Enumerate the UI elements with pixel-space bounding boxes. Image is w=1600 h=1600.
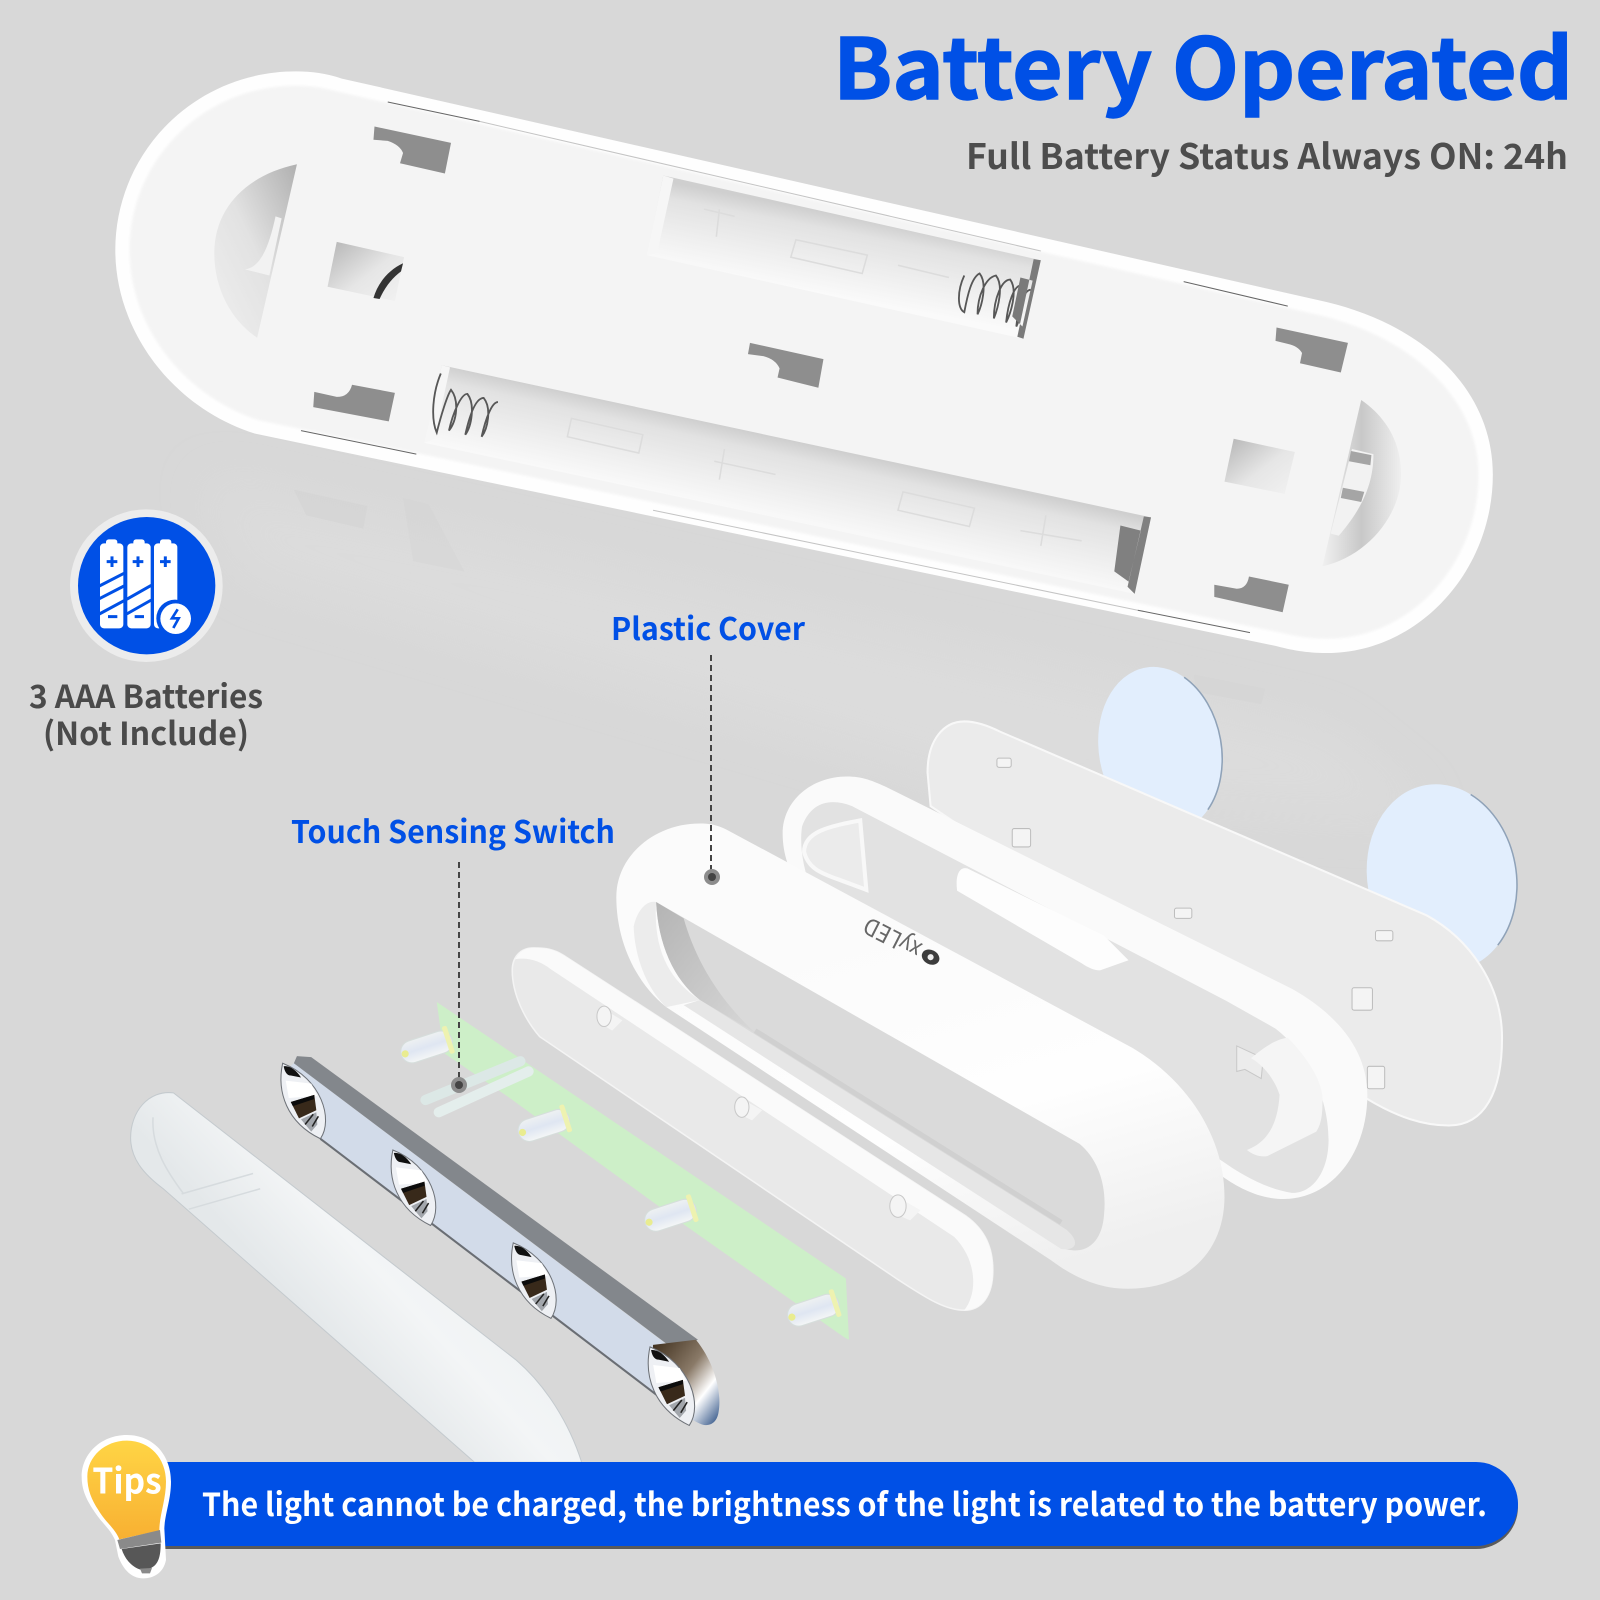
bulb tip — [140, 1568, 152, 1573]
caption line 2: (Not Include) — [43, 709, 249, 755]
bulb outline — [82, 1435, 171, 1578]
artwork: exploded product view — [115, 71, 1531, 1462]
cradle — [804, 820, 866, 890]
right square opening — [1224, 439, 1295, 494]
battery markings — [99, 556, 171, 617]
reflector top band — [294, 1056, 698, 1349]
inner tube — [957, 868, 1129, 970]
opening left wall lit — [634, 902, 700, 1007]
adhesive sticker disc lower — [1352, 772, 1531, 983]
chrome reflector bar — [281, 1056, 719, 1425]
plate upper rim — [515, 948, 993, 1310]
label: Touch Sensing Switch: Touch Sensing Switch — [291, 807, 615, 852]
cup 3 — [512, 1243, 556, 1318]
back case frame — [783, 777, 1367, 1199]
opening band shade — [755, 1031, 1061, 1222]
LED 2 — [514, 1104, 574, 1147]
left half-moon opening — [214, 164, 297, 338]
front diffuser plate — [512, 948, 993, 1310]
tips label: Tips — [92, 1453, 162, 1504]
LED 1 — [397, 1025, 456, 1069]
tab slot — [1237, 1046, 1263, 1079]
spring — [959, 273, 1031, 327]
mounting post 2 — [735, 1097, 762, 1120]
opening left wall shaded — [656, 902, 755, 1033]
tips banner — [160, 1462, 1518, 1549]
case cavity — [801, 802, 1329, 1193]
bulb base — [122, 1543, 161, 1570]
badge disc — [78, 517, 215, 654]
mounting post 3 — [890, 1195, 920, 1220]
end crescent — [1247, 1038, 1323, 1156]
bulb collar — [117, 1530, 161, 1549]
LED 3 — [641, 1194, 700, 1237]
callout line: Plastic Cover — [704, 655, 720, 885]
clip slot top left — [373, 127, 451, 173]
outer shell — [115, 71, 1493, 653]
opening lower band — [684, 1000, 1075, 1249]
subtitle: Full Battery Status Always ON: 24h — [966, 129, 1568, 180]
contact plate — [1114, 516, 1151, 594]
cup 4 — [648, 1347, 695, 1425]
front plastic cover frame — [616, 823, 1224, 1289]
back plate — [928, 721, 1502, 1126]
icon: three AAA batteries — [70, 509, 223, 662]
end rim — [653, 1340, 719, 1425]
cup 1 — [281, 1063, 326, 1139]
charge badge — [156, 600, 194, 637]
bulb glass — [87, 1441, 166, 1539]
callout line: Touch Sensing Switch — [451, 862, 467, 1093]
battery caption — [29, 672, 263, 755]
seam lines — [301, 102, 1288, 633]
clip slot middle — [748, 343, 823, 388]
clip slot bottom right — [1214, 577, 1289, 612]
icon: tips light bulb — [82, 1435, 171, 1578]
upper battery compartment — [647, 176, 1041, 339]
right half-moon opening — [1322, 400, 1401, 566]
cover opening — [656, 902, 1105, 1250]
reflector lower edge — [320, 1139, 663, 1400]
contact strip — [1012, 259, 1041, 339]
banner body — [160, 1462, 1518, 1546]
brand mark — [857, 910, 946, 978]
inner face — [130, 86, 1479, 639]
reflector face — [282, 1063, 671, 1400]
clips on back plate — [997, 758, 1393, 1089]
label: Plastic Cover: Plastic Cover — [611, 604, 805, 649]
title: Battery Operated — [833, 3, 1573, 124]
cup 2 — [391, 1150, 436, 1226]
banner text: The light cannot be charged, the brightness of the light is related to the battery power. — [202, 1480, 1487, 1526]
banner shadow — [160, 1465, 1518, 1549]
top device: open battery case — [115, 71, 1493, 653]
brand mark: xyLED — [857, 910, 927, 968]
device reflection — [204, 480, 1429, 816]
green circuit board with LEDs — [397, 1002, 849, 1340]
adhesive sticker disc upper — [1085, 657, 1235, 843]
left square opening — [328, 242, 404, 301]
clear lens cover — [131, 1093, 582, 1462]
mounting post 1 — [597, 1006, 622, 1031]
lower battery compartment — [424, 365, 1151, 594]
spring — [433, 373, 498, 437]
badge ring — [70, 509, 223, 662]
touch pins — [426, 1061, 529, 1112]
lens details — [153, 1117, 260, 1209]
battery bodies — [100, 539, 177, 628]
clip slot top right — [1276, 328, 1348, 372]
LED 4 — [784, 1288, 843, 1332]
caption line 1: 3 AAA Batteries — [29, 672, 263, 718]
clip slot bottom left — [313, 385, 395, 421]
